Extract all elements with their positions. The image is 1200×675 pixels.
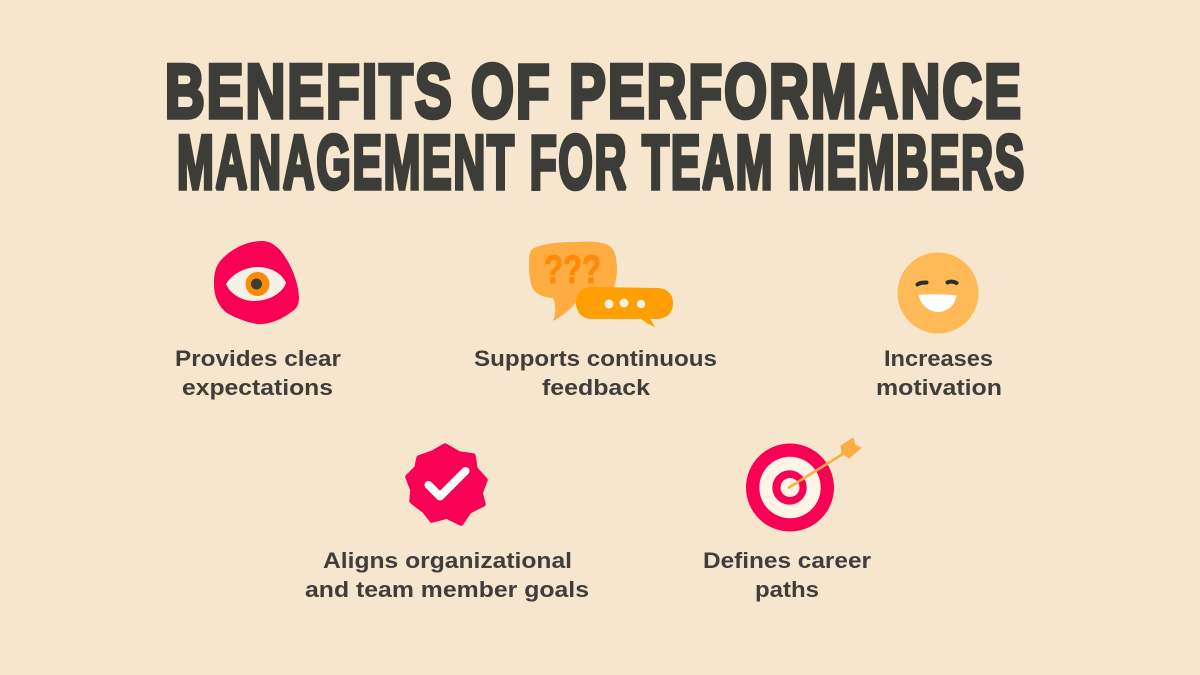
- label: supports continuous feedback: feedback: [542, 375, 651, 400]
- label: defines career paths: [703, 548, 871, 602]
- icon: target with arrow: [746, 438, 861, 532]
- label: supports continuous feedback: [474, 346, 717, 400]
- label: provides clear expectations: Provides clear: [175, 346, 341, 371]
- label: aligns organizational and team member goals: and team member goals: [305, 577, 589, 602]
- title: [165, 50, 1026, 206]
- label: provides clear expectations: [175, 346, 341, 400]
- icon: speech bubbles: [529, 242, 673, 327]
- icon: eye: [214, 241, 299, 324]
- icon: speech bubbles: ???: [544, 248, 601, 292]
- label: defines career paths: Defines career: [703, 548, 871, 573]
- label: increases motivation: Increases: [884, 346, 993, 371]
- label: aligns organizational and team member goals: Aligns organizational: [323, 548, 572, 573]
- label: increases motivation: motivation: [876, 375, 1002, 400]
- icon: check badge: [408, 446, 485, 523]
- label: provides clear expectations: expectations: [182, 375, 333, 400]
- icon: smiling face: [898, 252, 978, 334]
- label: increases motivation: [876, 346, 1002, 400]
- label: defines career paths: paths: [755, 577, 819, 602]
- label: supports continuous feedback: Supports continuous: [474, 346, 717, 371]
- label: aligns organizational and team member goals: [305, 548, 589, 602]
